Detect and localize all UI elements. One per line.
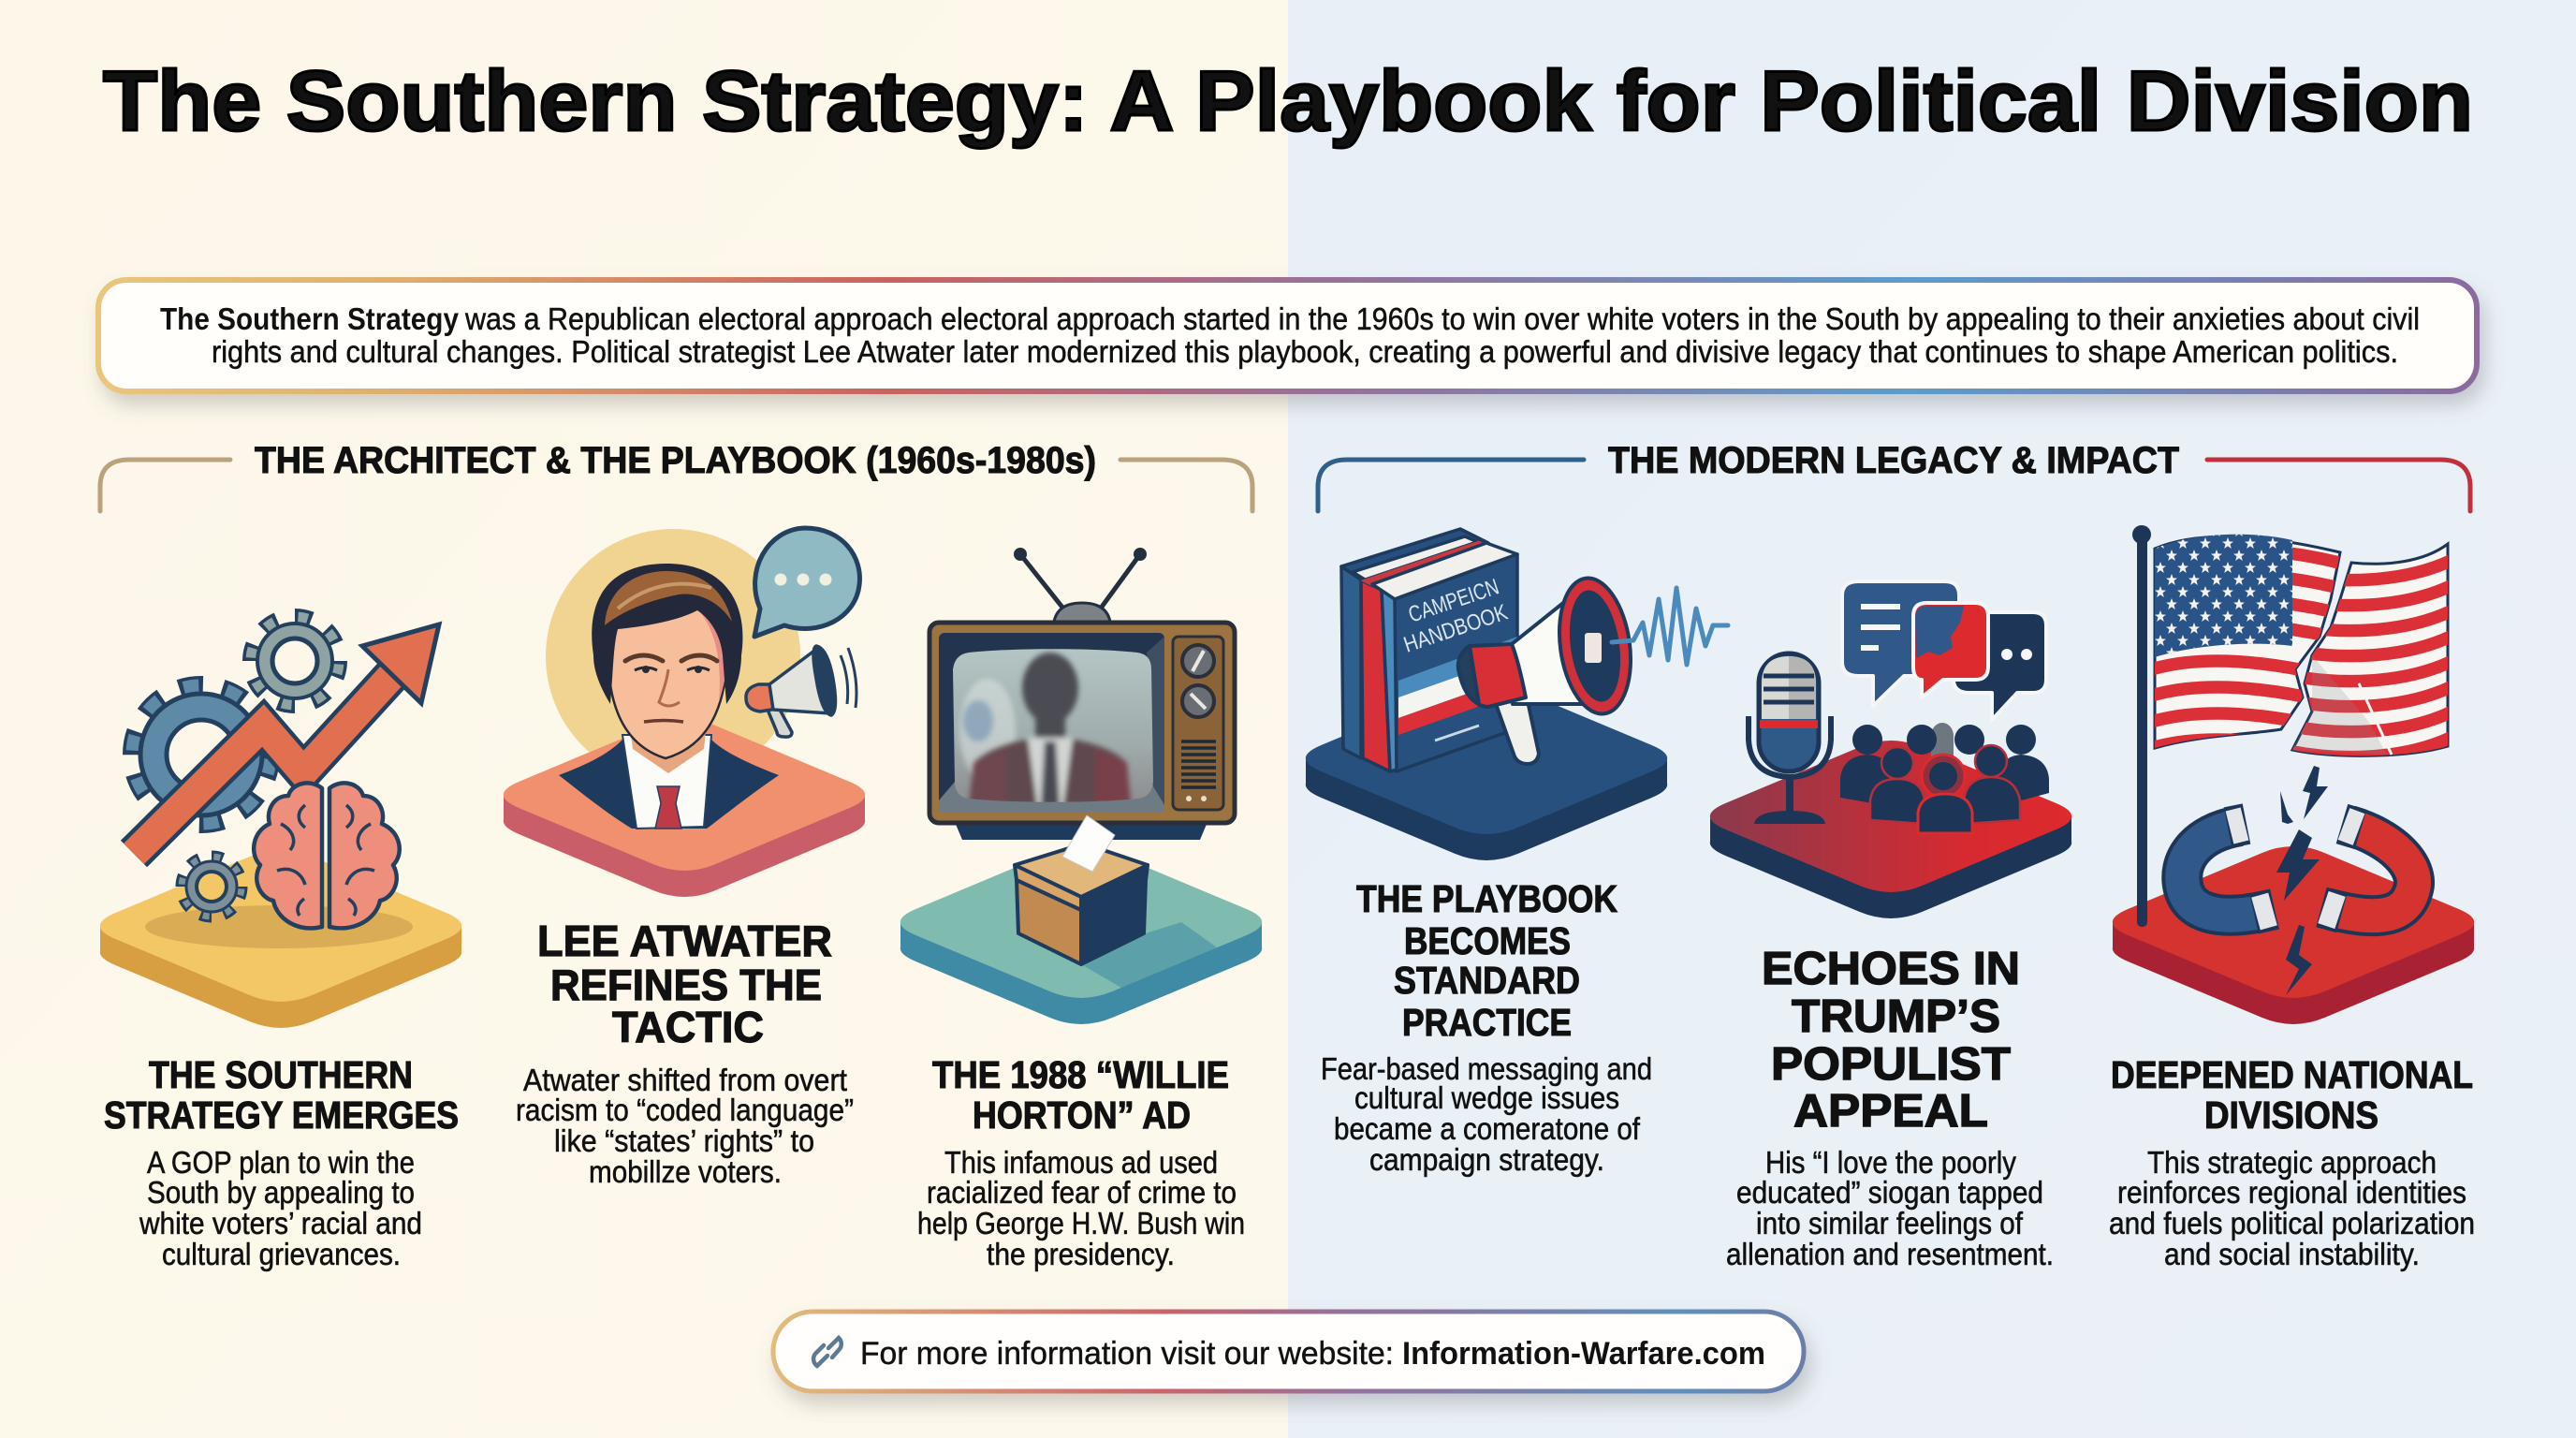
portrait — [559, 564, 779, 829]
body — [1726, 1145, 2054, 1271]
body: into similar feelings of — [1756, 1206, 2024, 1240]
megaphone — [1458, 574, 1639, 764]
icon: Lee Atwater portrait on salmon platform — [504, 528, 865, 897]
body — [1321, 1051, 1652, 1177]
books — [1341, 529, 1517, 771]
speech bubbles — [1842, 581, 2046, 720]
antennas — [1014, 548, 1147, 622]
background: left cream half — [0, 0, 1288, 1438]
body: This strategic approach — [2147, 1145, 2437, 1180]
torn flag — [2148, 535, 2452, 757]
crowd — [1840, 723, 2049, 833]
text block: the 1988 willie horton ad — [917, 1053, 1245, 1271]
heading — [1356, 877, 1617, 1044]
ballot box — [1015, 815, 1148, 964]
icon: television and ballot box on teal platform — [900, 548, 1262, 1024]
section header: architect and playbook: THE ARCHITECT & THE PLAYBOOK (1960s-1980s) — [255, 440, 1096, 481]
body: educated” siogan tapped — [1736, 1175, 2043, 1210]
sound wave — [1612, 588, 1728, 665]
heading — [537, 917, 832, 1051]
body: white voters’ racial and — [139, 1206, 422, 1240]
tiny gear — [183, 858, 241, 916]
heading: THE PLAYBOOK — [1356, 877, 1617, 920]
body: A GOP plan to win the — [147, 1145, 415, 1180]
text block: deepened national divisions — [2109, 1053, 2475, 1271]
footer text: For more information visit our website: — [860, 1336, 1394, 1372]
body — [516, 1063, 854, 1189]
text block: lee atwater refines the tactic — [516, 917, 854, 1189]
intro text: The Southern Strategy — [160, 301, 460, 336]
flag pole — [2132, 525, 2151, 927]
body: racism to “coded language” — [516, 1093, 854, 1127]
tv control panel — [1173, 637, 1223, 810]
body: racialized fear of crime to — [927, 1175, 1237, 1210]
body: and social instability. — [2164, 1237, 2420, 1271]
body — [2109, 1145, 2475, 1271]
body: mobillze voters. — [589, 1154, 782, 1189]
heading: THE SOUTHERN — [149, 1053, 413, 1096]
icon: gears, arrow and brain on yellow platform — [100, 618, 461, 1028]
small gear — [252, 618, 338, 704]
stand — [955, 822, 1208, 840]
megaphone — [746, 646, 856, 737]
icon: torn flag and broken magnets on red platform — [2113, 525, 2474, 1024]
heading: PRACTICE — [1402, 1001, 1572, 1044]
intro text: rights and cultural changes. Political strategist Lee Atwater later modernized this playbook, creating a powerful and divisive legacy that continues to shape American politics. — [212, 334, 2398, 369]
heading: STANDARD — [1394, 959, 1580, 1002]
book cover text: HANDBOOK — [1400, 600, 1511, 658]
text block: the southern strategy emerges — [104, 1053, 459, 1271]
heading — [104, 1053, 459, 1137]
heading: THE 1988 “WILLIE — [932, 1053, 1229, 1096]
body: help George H.W. Bush win — [917, 1206, 1245, 1240]
broken magnets — [2182, 824, 2414, 916]
body: like “states’ rights” to — [554, 1123, 814, 1158]
section header: modern legacy and impact — [1318, 440, 2470, 511]
big gear — [133, 686, 270, 823]
heading: DIVISIONS — [2204, 1093, 2378, 1137]
tv screen with silhouette — [950, 648, 1156, 805]
lightning bolts — [2276, 766, 2328, 995]
icon: microphone, speech bubbles and crowd on red platform — [1710, 581, 2071, 918]
heading: ECHOES IN — [1762, 944, 2020, 994]
speech bubble — [754, 528, 859, 637]
book cover text: CAMPEICN — [1405, 574, 1502, 628]
body: cultural grievances. — [162, 1237, 401, 1271]
footer text — [860, 1336, 1765, 1372]
body: the presidency. — [987, 1237, 1175, 1271]
heading: LEE ATWATER — [537, 917, 832, 965]
heading: TACTIC — [612, 1003, 764, 1051]
body: and fuels political polarization — [2109, 1206, 2475, 1240]
heading: POPULIST — [1771, 1039, 2011, 1090]
body: Atwater shifted from overt — [523, 1063, 847, 1097]
text block: the playbook becomes standard practice — [1321, 877, 1652, 1177]
footer text: Information-Warfare.com — [1402, 1336, 1765, 1372]
tv cabinet — [929, 623, 1235, 823]
icon: link — [813, 1338, 842, 1366]
section header: modern legacy and impact: THE MODERN LEGACY & IMPACT — [1608, 440, 2179, 481]
heading: HORTON” AD — [973, 1093, 1191, 1137]
body — [139, 1145, 422, 1271]
intro text — [160, 301, 2420, 369]
background: right blue half — [1288, 0, 2576, 1438]
body: South by appealing to — [147, 1175, 415, 1210]
section header: architect and playbook — [100, 440, 1252, 511]
body: This infamous ad used — [944, 1145, 1218, 1180]
heading — [2111, 1053, 2473, 1137]
book cover text — [1400, 574, 1511, 658]
body — [917, 1145, 1245, 1271]
heading: REFINES THE — [550, 961, 822, 1009]
microphone — [1749, 653, 1831, 824]
footer call to action — [773, 1312, 1804, 1391]
body: His “I love the poorly — [1765, 1145, 2016, 1180]
body: campaign strategy. — [1369, 1142, 1604, 1177]
heading: APPEAL — [1793, 1086, 1988, 1137]
text block: echoes in trump's populist appeal — [1726, 944, 2054, 1271]
heading: BECOMES — [1404, 919, 1571, 962]
title: The Southern Strategy: A Playbook for Political Division — [103, 54, 2473, 149]
intro callout — [98, 280, 2477, 391]
body: Fear-based messaging and — [1321, 1051, 1652, 1086]
heading: DEEPENED NATIONAL — [2111, 1053, 2473, 1096]
brain — [254, 783, 400, 928]
intro text: was a Republican electoral approach electoral approach started in the 1960s to win over white voters in the South by appealing to their anxieties about civil — [464, 301, 2420, 336]
heading — [932, 1053, 1229, 1137]
heading: STRATEGY EMERGES — [104, 1093, 459, 1137]
body: reinforces regional identities — [2117, 1175, 2466, 1210]
halo circle — [546, 529, 800, 784]
body: allenation and resentment. — [1726, 1237, 2054, 1271]
growth arrow — [134, 624, 439, 854]
body: cultural wedge issues — [1354, 1080, 1619, 1115]
icon: campaign handbook and megaphone on navy platform — [1306, 529, 1728, 860]
heading: TRUMP’S — [1792, 991, 2000, 1042]
body: became a comeratone of — [1334, 1111, 1641, 1146]
heading — [1762, 944, 2020, 1137]
